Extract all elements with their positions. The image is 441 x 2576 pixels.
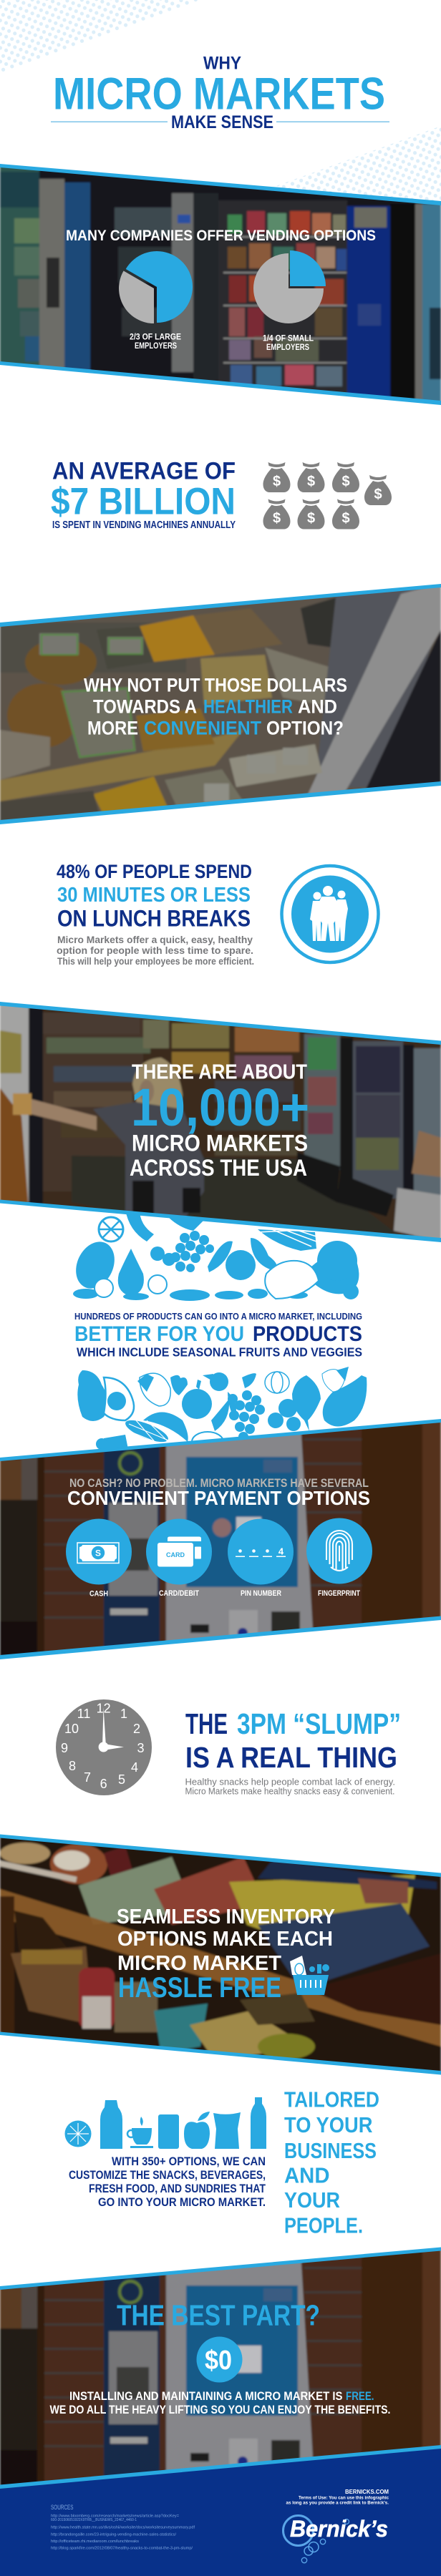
icons: products row [64, 2097, 266, 2149]
icon: cash: S [95, 1548, 101, 1558]
text block: seven billion: IS SPENT IN VENDING MACHINES ANNUALLY [52, 519, 236, 531]
label: pin number: PIN NUMBER [241, 1589, 281, 1598]
icon: money bags [263, 462, 392, 530]
label: small employers: 1/4 OF SMALL [263, 335, 314, 343]
background dots right [272, 126, 441, 208]
text block: seven billion: AN AVERAGE OF [52, 458, 236, 485]
text block: better for you products: PRODUCTS [253, 1322, 362, 1346]
sources: http://officeteam.rhi.mediaroom.com/lunchbreaks [51, 2540, 139, 2544]
heading: payment options: NO CASH? NO PROBLEM. MICRO MARKETS HAVE SEVERAL [69, 1476, 369, 1490]
text block: seamless inventory: OPTIONS MAKE EACH [117, 1928, 333, 1951]
text block: tailored: YOUR [284, 2187, 340, 2212]
icon: apple [184, 2112, 210, 2149]
text block: 3pm slump: 3PM “SLUMP” [237, 1707, 401, 1740]
icon: money bags: $ [273, 474, 281, 489]
panel: inventory photo [0, 1828, 441, 2079]
icon: clock [56, 1699, 152, 1795]
icon: coffee cup [127, 2117, 153, 2148]
heading: vending options: MANY COMPANIES OFFER VENDING OPTIONS [66, 228, 376, 244]
text block: healthier option question: CONVENIENT [144, 717, 261, 738]
text block: 10,000 micro markets: ACROSS THE USA [130, 1155, 307, 1181]
sources [51, 2504, 195, 2550]
text block: lunch breaks: Micro Markets offer a quick, easy, healthy [57, 935, 253, 945]
icon: clock: 11 [77, 1707, 90, 1721]
text block: 10,000 micro markets [130, 1060, 309, 1181]
text block: free installation: FREE. [346, 2389, 374, 2403]
text block: lunch breaks: 48% OF PEOPLE SPEND [57, 861, 252, 882]
icon: zero dollars: $0 [205, 2346, 232, 2376]
illustration: fruit and vegetables top [69, 1209, 359, 1301]
footer background [0, 2447, 441, 2576]
text block: seamless inventory: SEAMLESS INVENTORY [117, 1906, 335, 1928]
icon: money bags: $ [374, 487, 382, 502]
icon: money bags: $ [341, 511, 350, 527]
text block: customize options: FRESH FOOD, AND SUNDRIES THAT [89, 2182, 266, 2195]
text block: healthier option question: HEALTHIER [203, 696, 293, 717]
sources: 600-201506051922X9TRB__BUSNEWS_22467_4460-1 [51, 2518, 137, 2522]
terms of use: BERNICKS.COM [345, 2489, 389, 2495]
text block: better for you products: BETTER FOR YOU [74, 1322, 244, 1346]
label: large employers: 2/3 OF LARGE [130, 333, 181, 342]
illustration: fruit and vegetables bottom [77, 1367, 367, 1458]
icon: clock: 3 [137, 1741, 145, 1755]
text block: healthier option question: OPTION? [266, 717, 344, 738]
pie chart: large employers [119, 251, 193, 323]
icon: clock: 10 [64, 1722, 79, 1736]
logo: bernick's [284, 2516, 388, 2563]
text block: healthier option question: TOWARDS A [93, 696, 197, 717]
icon: orange slice [64, 2121, 92, 2147]
icon: clock: 1 [120, 1707, 127, 1721]
icon: fingerprint [306, 1518, 372, 1584]
text block: 3pm slump: IS A REAL THING [185, 1741, 397, 1774]
text block: tailored: TO YOUR [284, 2112, 372, 2137]
text block: tailored [284, 2087, 379, 2238]
title line micro markets: MICRO MARKETS [53, 69, 385, 119]
text block: tailored: BUSINESS [284, 2138, 377, 2163]
text block: better for you products: HUNDREDS OF PRODUCTS CAN GO INTO A MICRO MARKET, INCLUDING [74, 1311, 362, 1322]
text block: lunch breaks: This will help your employees be more efficient. [57, 956, 254, 967]
panel: fresh food photo [0, 580, 441, 830]
panel: best part photo [0, 2238, 441, 2503]
text block: healthier option question [84, 674, 347, 738]
sources: http://www.health.state.mn.us/divs/oshii/worksite/docs/worksitesurveysummary.pdf [51, 2526, 195, 2530]
panel: payment options photo [0, 1410, 441, 1674]
text block: 10,000 micro markets: MICRO MARKETS [132, 1131, 308, 1156]
icon: card [146, 1518, 212, 1584]
icon: clock: 12 [97, 1702, 111, 1716]
label: small employers [263, 335, 314, 352]
text block: customize options: GO INTO YOUR MICRO MARKET. [98, 2195, 266, 2209]
icon: money bags: $ [273, 511, 281, 527]
icon: money bags: $ [307, 474, 315, 489]
text block: seven billion [51, 458, 236, 531]
text block: 3pm slump: Micro Markets make healthy snacks easy & convenient. [185, 1786, 395, 1796]
icon: card: CARD [166, 1551, 185, 1558]
text block: better for you products: WHICH INCLUDE SEASONAL FRUITS AND VEGGIES [77, 1345, 362, 1360]
icon: clock: 5 [118, 1772, 125, 1787]
text block: healthier option question: WHY NOT PUT THOSE DOLLARS [84, 674, 347, 696]
text block: seven billion: $7 BILLION [51, 481, 236, 522]
label: large employers [130, 333, 181, 351]
text block: customize options [69, 2155, 266, 2209]
text block: lunch breaks [57, 861, 254, 967]
icon: clock: 7 [84, 1770, 91, 1785]
label: large employers: EMPLOYERS [135, 342, 177, 351]
background dots top left [0, 0, 200, 73]
text block: tailored: PEOPLE. [284, 2212, 363, 2238]
text block: seamless inventory: HASSLE FREE [118, 1972, 281, 2004]
title [51, 53, 389, 132]
icon: clock: 4 [131, 1760, 138, 1775]
text block: tailored: AND [284, 2162, 329, 2188]
sources: http://blog.sparkfire.com/2012/08/07/healthy-snacks-to-combat-the-3-pm-slump/ [51, 2546, 193, 2550]
icon: sports bottle [100, 2100, 122, 2149]
sources: http://brandongaille.com/23-intriguing-vending-machine-sales-statistics/ [51, 2533, 176, 2537]
text block: seamless inventory: MICRO MARKET [117, 1952, 281, 1975]
icon: zero dollars [196, 2337, 242, 2383]
text block: healthier option question: MORE [87, 717, 138, 738]
text block: lunch breaks: 30 MINUTES OR LESS [57, 884, 251, 907]
icon: snack bag [213, 2112, 241, 2149]
icon: clock: 9 [61, 1741, 68, 1755]
heading: payment options [67, 1476, 370, 1509]
text block: free installation: INSTALLING AND MAINTAINING A MICRO MARKET IS [69, 2389, 342, 2403]
text block: 10,000 micro markets: THERE ARE ABOUT [132, 1060, 308, 1083]
sources: http://www.bloomberg.com/research/markets/news/article.asp?docKey= [51, 2514, 179, 2519]
text block: lunch breaks: ON LUNCH BREAKS [57, 906, 251, 932]
label: small employers: EMPLOYERS [266, 343, 309, 352]
sources: SOURCES [51, 2504, 73, 2511]
text block: healthier option question: AND [298, 696, 337, 717]
text block: 3pm slump [185, 1707, 401, 1796]
icon: basket [290, 1956, 329, 1995]
text block: better for you products [74, 1311, 362, 1360]
heading: payment options: CONVENIENT PAYMENT OPTIONS [67, 1487, 370, 1509]
panel: micro market photo [0, 998, 441, 1245]
label: fingerprint: FINGERPRINT [318, 1589, 360, 1598]
text block: customize options: WITH 350+ OPTIONS, WE CAN [112, 2155, 266, 2168]
icon: pin number [228, 1518, 294, 1584]
panel: vending machines photo [0, 161, 441, 408]
text block: lunch breaks: option for people with less time to spare. [57, 945, 253, 956]
icon: clock: 8 [69, 1759, 76, 1773]
icon: cash [66, 1518, 132, 1584]
terms of use: as long as you provide a credit link to Bernick's. [286, 2500, 389, 2506]
text block: tailored: TAILORED [284, 2087, 379, 2112]
text block: 3pm slump: THE [185, 1707, 228, 1740]
title line make sense: MAKE SENSE [171, 112, 273, 132]
icon: clock: 6 [100, 1777, 107, 1791]
text block: 3pm slump: Healthy snacks help people combat lack of energy. [185, 1777, 395, 1787]
label: card debit: CARD/DEBIT [159, 1589, 199, 1598]
icon: money bags: $ [341, 474, 350, 489]
heading: best part: THE BEST PART? [117, 2298, 320, 2331]
text block: free installation [50, 2389, 391, 2416]
label: cash: CASH [89, 1590, 108, 1599]
icon: can [158, 2114, 179, 2149]
text block: seamless inventory [117, 1906, 335, 2004]
icon: water bottle [251, 2097, 266, 2149]
logo: bernick's: Bernick’s [290, 2516, 388, 2542]
icon: clock: 2 [133, 1722, 140, 1736]
terms of use: Terms of Use: You can use this infographic [299, 2496, 389, 2500]
text block: customize options: CUSTOMIZE THE SNACKS, BEVERAGES, [69, 2168, 266, 2182]
title line why: WHY [203, 53, 241, 73]
terms of use [286, 2489, 389, 2506]
icon: money bags: $ [307, 511, 315, 527]
icon: people in circle [282, 866, 378, 962]
pie chart: small employers [253, 250, 326, 323]
text block: 10,000 micro markets: 10,000+ [131, 1078, 309, 1137]
icon: pin number: 4 [278, 1546, 284, 1557]
